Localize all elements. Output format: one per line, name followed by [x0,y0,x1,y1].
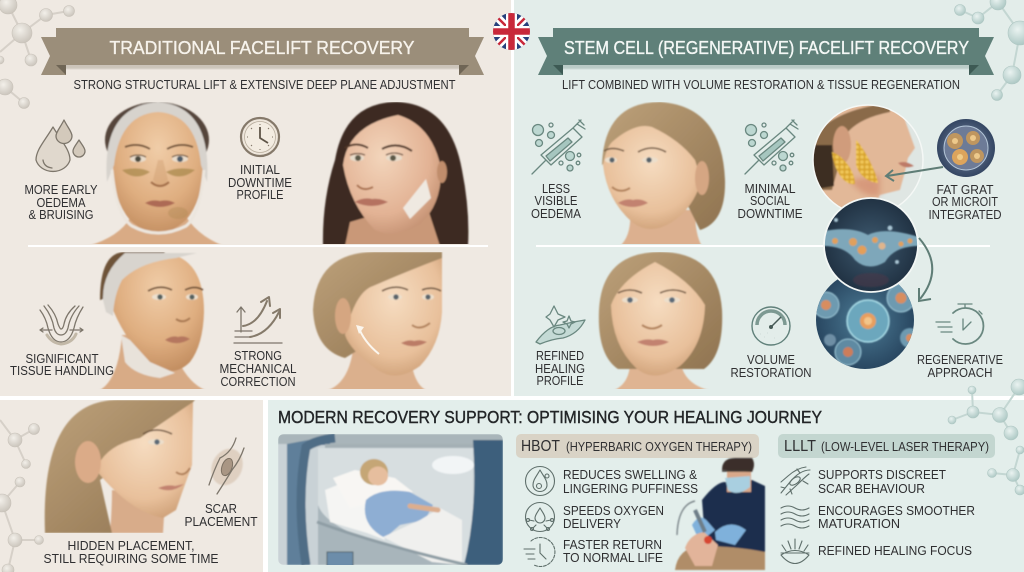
label: significant tissue handling: SIGNIFICANT [26,352,99,366]
icon: healing cell with sparkles [536,306,585,344]
label: regenerative approach [917,353,1003,380]
icon: clock [241,118,279,156]
label: scar placement: SCAR [205,502,237,516]
label: volume restoration: VOLUME [747,353,795,367]
pill: HBOT heading [516,434,759,458]
label: initial downtime profile [228,163,292,202]
item: reduces swelling: REDUCES SWELLING & [563,467,697,482]
pill: HBOT heading: (HYPERBARIC OXYGEN THERAPY) [566,440,752,454]
photo: dark-haired woman with jaw dressing [323,102,468,246]
item: encourages smoother maturation [781,503,975,531]
label: significant tissue handling: TISSUE HANDLING [10,364,114,378]
item: refined healing focus [781,539,972,564]
item: supports discreet scar: SUPPORTS DISCREET [818,467,946,482]
divider line [28,245,488,247]
label: minimal social downtime: MINIMAL [744,182,796,196]
arrow: cell to cheek [886,167,943,181]
heading: modern recovery support: MODERN RECOVERY SUPPORT: OPTIMISING YOUR HEALING JOURNEY [278,407,822,427]
label: regenerative approach: APPROACH [928,366,992,380]
icon: tissue handling [40,305,83,344]
molecule decoration bottom left [0,420,44,572]
label: strong mechanical correction: CORRECTION [220,375,296,389]
item: supports discreet scar [781,467,946,496]
label: less visible oedema: OEDEMA [531,207,582,221]
label: strong mechanical correction: STRONG [234,349,282,363]
list: LLLT benefits [781,467,975,564]
label: less visible oedema [531,182,582,221]
panel: traditional facelift recovery [0,0,511,396]
label: regenerative approach: REGENERATIVE [917,353,1003,367]
photo: three-quarter face with headband and chin strap [98,252,207,391]
photo circle: stem cells large [816,279,914,369]
label: less visible oedema: LESS [542,182,570,196]
photo circle: cell membrane [820,198,922,292]
label: significant tissue handling [10,352,114,378]
icon: syringe with cells (less visible oedema) [532,120,585,174]
label: volume restoration [730,353,812,380]
photo: hyperbaric oxygen chamber [278,434,503,567]
label: minimal social downtime [738,182,802,221]
label: refined healing profile [535,349,585,388]
photo: front face with bandage and bruising [88,102,224,246]
list: HBOT benefits [524,466,698,567]
title ribbon: stem cell: STEM CELL (REGENERATIVE) FACELIFT RECOVERY [564,37,969,58]
subtitle: stem cell: LIFT COMBINED WITH VOLUME RESTORATION & TISSUE REGENERATION [562,77,960,92]
label: fat graft or microfat integrated: INTEGRATED [928,208,1002,222]
label: scar placement: PLACEMENT [184,515,258,529]
item: faster return [524,537,663,567]
label: scar placement [184,502,258,529]
label: strong mechanical correction: MECHANICAL [220,362,297,376]
label: refined healing profile: HEALING [535,362,585,376]
item: faster return: FASTER RETURN [563,537,662,552]
icon: water drops [36,120,85,171]
item: refined healing focus: REFINED HEALING FOCUS [818,543,972,558]
label: less visible oedema: VISIBLE [534,194,578,208]
pill: LLLT heading: (LOW-LEVEL LASER THERAPY) [821,440,989,454]
item: encourages smoother maturation: ENCOURAGES SMOOTHER [818,503,975,518]
photo circle: fat graft at cheek [812,104,924,208]
label: volume restoration: RESTORATION [730,366,812,380]
photo: front bob woman [599,252,722,391]
item: speeds oxygen delivery: DELIVERY [563,516,621,531]
molecule decoration bottom right [948,379,1024,495]
photo: bob hair woman with lift arrow [313,252,442,391]
label: hidden placement: HIDDEN PLACEMENT, [68,538,194,553]
label: initial downtime profile: DOWNTIME [228,176,292,190]
label: fat graft or microfat integrated: OR MICROIT [932,195,998,209]
panel: modern recovery support [268,379,1024,572]
item: speeds oxygen delivery: SPEEDS OXYGEN [563,503,664,518]
item: supports discreet scar: SCAR BEHAVIOUR [818,481,925,496]
item: reduces swelling: LINGERING PUFFINESS [563,481,698,496]
molecule decoration top left [0,0,74,108]
label: more early oedema: & BRUISING [28,208,94,222]
label: initial downtime profile: PROFILE [236,188,284,202]
panel: stem cell facelift recovery [514,0,1024,396]
label: more early oedema: OEDEMA [36,196,86,210]
title ribbon: traditional: TRADITIONAL FACELIFT RECOVERY [110,37,414,58]
subtitle: traditional: STRONG STRUCTURAL LIFT & EXTENSIVE DEEP PLANE ADJUSTMENT [74,77,456,92]
photo circle: microscopic fat cells [937,119,995,177]
label: refined healing profile: PROFILE [536,374,584,388]
icon: volume gauge [752,307,790,345]
panel: scar placement [0,400,263,572]
title ribbon: stem cell [538,28,994,75]
icon: scar tissue [205,438,249,494]
label: strong mechanical correction [220,349,297,389]
pill: LLLT heading [778,434,995,458]
label: fat graft or microfat integrated: FAT GRAT [936,183,994,197]
photo: profile showing hidden scar [45,400,195,533]
molecule decoration top right [954,0,1024,100]
label: hidden placement [44,538,219,566]
item: encourages smoother maturation: MATURATION [818,516,900,531]
item: speeds oxygen delivery [526,502,664,532]
icon: stopwatch [936,304,983,344]
title ribbon: traditional [41,28,484,75]
label: fat graft or microfat integrated [928,183,1002,222]
item: reduces swelling [526,466,698,496]
photo: clinician applying low-level laser [675,458,765,570]
label: minimal social downtime: SOCIAL [750,194,790,208]
divider line [536,245,990,247]
arrow: curved to stem cells [919,238,932,301]
label: hidden placement: STILL REQUIRING SOME TIME [44,551,219,566]
pill: LLLT heading: LLLT [784,438,816,455]
label: more early oedema: MORE EARLY [24,183,98,197]
item: faster return: TO NORMAL LIFE [563,550,663,565]
icon: union jack flag [493,13,530,50]
label: initial downtime profile: INITIAL [240,163,280,177]
label: refined healing profile: REFINED [536,349,584,363]
icon: upward curved arrows chart [234,297,282,343]
icon: syringe with cells (minimal social downtime) [745,120,798,174]
label: more early oedema [24,183,98,222]
pill: HBOT heading: HBOT [521,438,560,455]
label: minimal social downtime: DOWNTIME [738,207,802,221]
photo: refined three-quarter face (stem cell) [602,102,725,246]
